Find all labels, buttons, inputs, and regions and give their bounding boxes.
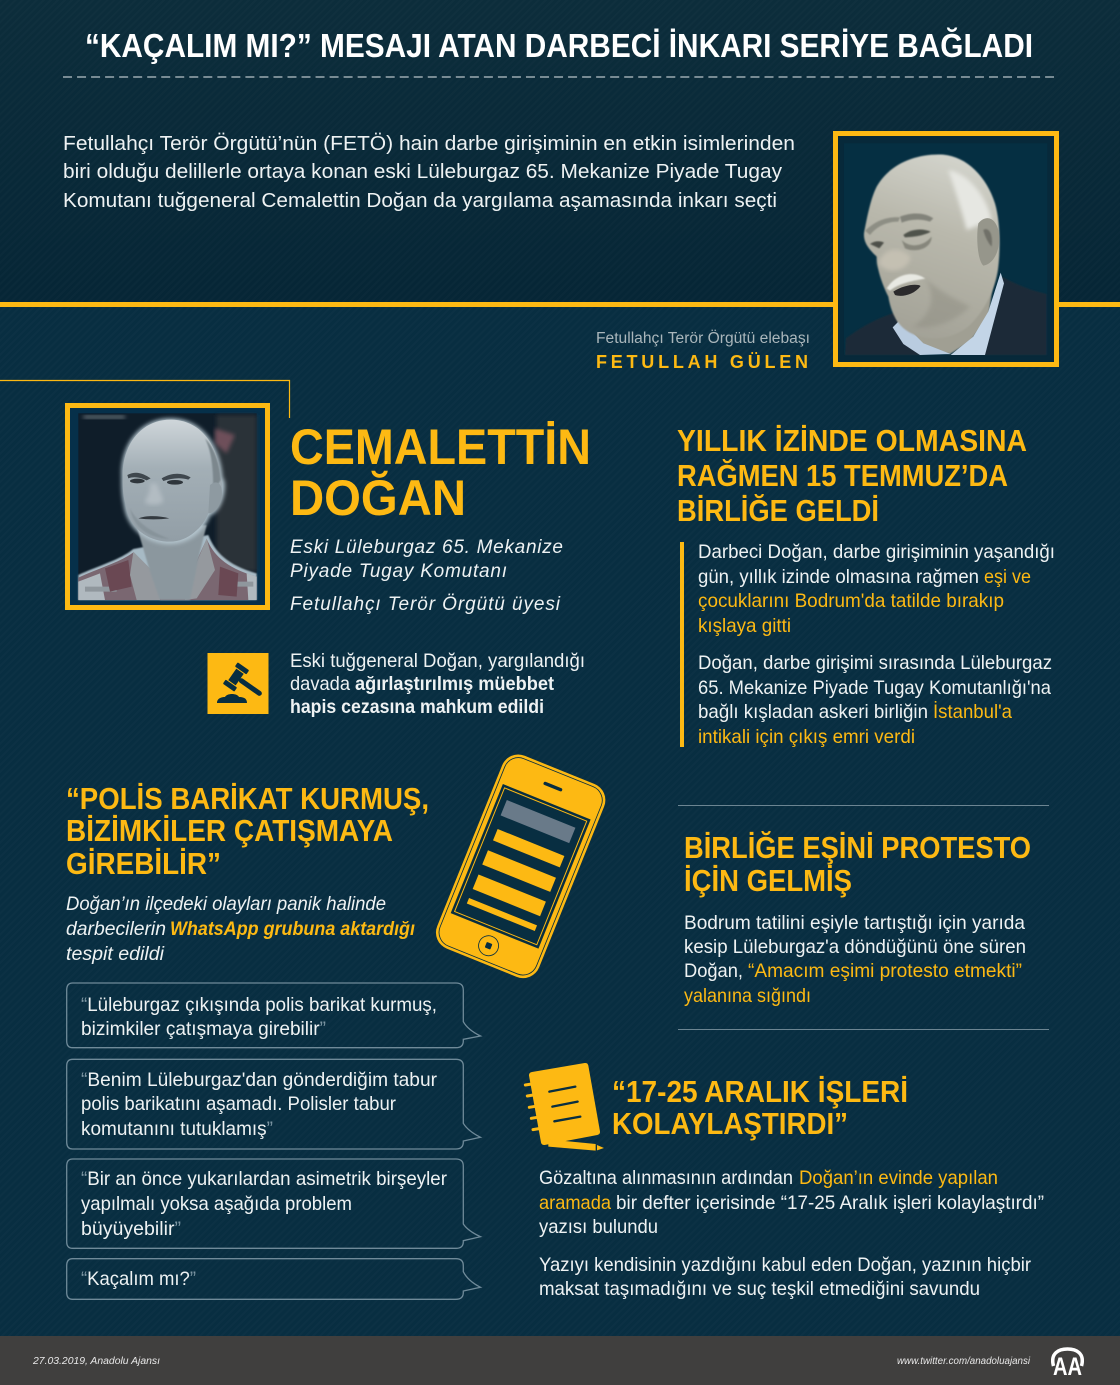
body text: yazısı bulundu xyxy=(539,1216,658,1238)
body text: Bodrum tatilini eşiyle tartıştığı için yarıda xyxy=(684,912,1025,934)
panel: WhatsApp messages xyxy=(66,781,480,1299)
intro text: Komutanı tuğgeneral Cemalettin Doğan da yargılama aşamasında inkarı seçti xyxy=(63,190,777,212)
intro text xyxy=(66,893,416,965)
heading: “17-25 ARALIK İŞLERİ xyxy=(612,1074,908,1109)
body text: bir defter içerisinde “17-25 Aralık işleri kolaylaştırdı” xyxy=(616,1192,1044,1214)
footer xyxy=(0,1336,1120,1385)
name heading: DOĞAN xyxy=(290,470,466,526)
role description xyxy=(290,537,563,615)
body text: Doğan, darbe girişimi sırasında Lüleburgaz xyxy=(698,652,1052,674)
body text xyxy=(539,1167,1044,1300)
speech bubble 3: “Bir an önce yukarılardan asimetrik birşeyler xyxy=(81,1168,447,1190)
caption: Fetullah Gülen: FETULLAH GÜLEN xyxy=(596,352,808,372)
role description: Eski Lüleburgaz 65. Mekanize xyxy=(290,537,563,558)
heading: BİRLİĞE EŞİNİ PROTESTO xyxy=(684,830,1031,865)
speech bubble 3: yapılmalı yoksa aşağıda problem xyxy=(81,1193,352,1215)
body text: bağlı kışladan askeri birliğin xyxy=(698,701,928,723)
speech bubble 2 xyxy=(67,1059,480,1149)
speech bubble 4 xyxy=(67,1259,480,1299)
body text: kesip Lüleburgaz'a döndüğünü öne süren xyxy=(684,936,1026,958)
role description: Fetullahçı Terör Örgütü üyesi xyxy=(290,594,561,615)
sentence text xyxy=(290,650,585,718)
body text: eşi ve xyxy=(984,566,1031,588)
heading: İÇİN GELMİŞ xyxy=(684,863,852,898)
heading xyxy=(612,1074,908,1141)
heading: BİZİMKİLER ÇATIŞMAYA xyxy=(66,813,393,848)
intro text: Fetullahçı Terör Örgütü’nün (FETÖ) hain darbe girişiminin en etkin isimlerinden xyxy=(63,133,795,155)
body text xyxy=(698,541,1055,748)
credit: 27.03.2019, Anadolu Ajansı xyxy=(32,1356,160,1367)
intro text: darbecilerin xyxy=(66,918,166,940)
panel: eşini protesto xyxy=(684,830,1031,1007)
heading: RAĞMEN 15 TEMMUZ’DA xyxy=(677,458,1008,493)
intro text: tespit edildi xyxy=(66,943,165,965)
body text: İstanbul'a xyxy=(933,700,1012,723)
heading: KOLAYLAŞTIRDI” xyxy=(612,1106,848,1141)
body text xyxy=(684,912,1026,1007)
body text: çocuklarını Bodrum'da tatilde bırakıp xyxy=(698,590,1004,612)
name heading: CEMALETTİN xyxy=(290,419,591,475)
name heading xyxy=(290,419,591,526)
panel: header xyxy=(63,27,1054,212)
speech bubble 1: bizimkiler çatışmaya girebilir” xyxy=(81,1018,326,1040)
body text: 65. Mekanize Piyade Tugay Komutanlığı'na xyxy=(698,677,1051,699)
twitter link: www.twitter.com/anadoluajansi xyxy=(897,1356,1031,1367)
speech bubble 2: “Benim Lüleburgaz'dan gönderdiğim tabur xyxy=(81,1069,437,1091)
caption: Fetullah Gülen: Fetullahçı Terör Örgütü elebaşı xyxy=(596,329,810,347)
body text: Yazıyı kendisinin yazdığını kabul eden Doğan, yazının hiçbir xyxy=(539,1254,1031,1276)
body text: maksat taşımadığını ve suç teşkil etmediğini savundu xyxy=(539,1278,980,1300)
yellow divider band xyxy=(0,302,1120,307)
body text: Doğan, xyxy=(684,960,743,982)
speech bubble 3 xyxy=(67,1159,480,1248)
sentence text: Eski tuğgeneral Doğan, yargılandığı xyxy=(290,650,585,672)
icon: phone xyxy=(431,749,611,983)
portrait: Fetullah Gülen xyxy=(836,134,1056,364)
title: “KAÇALIM MI?” MESAJI ATAN DARBECİ İNKARI SERİYE BAĞLADI xyxy=(85,27,1033,64)
sentence text: hapis cezasına mahkum edildi xyxy=(290,696,544,718)
intro text xyxy=(63,133,795,212)
speech bubble 4: “Kaçalım mı?” xyxy=(81,1268,196,1290)
intro text: biri olduğu delillerle ortaya konan eski Lüleburgaz 65. Mekanize Piyade Tugay xyxy=(63,161,782,183)
portrait: Cemalettin Doğan xyxy=(68,406,268,608)
speech bubble 1: “Lüleburgaz çıkışında polis barikat kurmuş, xyxy=(81,994,437,1016)
icon: Anadolu Agency logo: AA xyxy=(1053,1353,1082,1381)
sentence text: ağırlaştırılmış müebbet xyxy=(355,673,554,695)
heading xyxy=(677,423,1027,528)
heading xyxy=(684,830,1031,898)
speech bubble 1 xyxy=(67,983,480,1048)
body text: aramada xyxy=(539,1192,611,1214)
body text: Doğan’ın evinde yapılan xyxy=(799,1167,998,1189)
panel: yıllık izin xyxy=(677,423,1055,748)
role description: Piyade Tugay Komutanı xyxy=(290,561,507,582)
speech bubble 3: büyüyebilir” xyxy=(81,1218,181,1240)
heading: GİREBİLİR” xyxy=(66,846,221,881)
heading: “POLİS BARİKAT KURMUŞ, xyxy=(66,781,429,816)
speech bubble 2: polis barikatını aşamadı. Polisler tabur xyxy=(81,1093,396,1115)
intro text: WhatsApp grubuna aktardığı xyxy=(170,918,416,940)
sentence text: davada xyxy=(290,673,350,695)
heading: BİRLİĞE GELDİ xyxy=(677,493,879,528)
panel: 17-25 Aralık xyxy=(539,1074,1044,1300)
caption: Fetullah Gülen xyxy=(596,329,810,372)
panel: Cemalettin Doğan profile xyxy=(208,419,591,718)
icon: notebook xyxy=(525,1063,604,1151)
icon: gavel xyxy=(208,653,269,714)
body text: kışlaya gitti xyxy=(698,615,791,637)
speech bubble 2: komutanını tutuklamış” xyxy=(81,1118,273,1140)
heading: YILLIK İZİNDE OLMASINA xyxy=(677,423,1027,458)
body text: “Amacım eşimi protesto etmekti” xyxy=(748,960,1022,982)
body text: Darbeci Doğan, darbe girişiminin yaşandığı xyxy=(698,541,1055,563)
body text: intikali için çıkış emri verdi xyxy=(698,726,915,748)
body text: yalanına sığındı xyxy=(684,985,811,1007)
body text: Gözaltına alınmasının ardından xyxy=(539,1167,793,1189)
heading xyxy=(66,781,429,881)
intro text: Doğan’ın ilçedeki olayları panik halinde xyxy=(66,893,386,915)
body text: gün, yıllık izinde olmasına rağmen xyxy=(698,566,979,588)
